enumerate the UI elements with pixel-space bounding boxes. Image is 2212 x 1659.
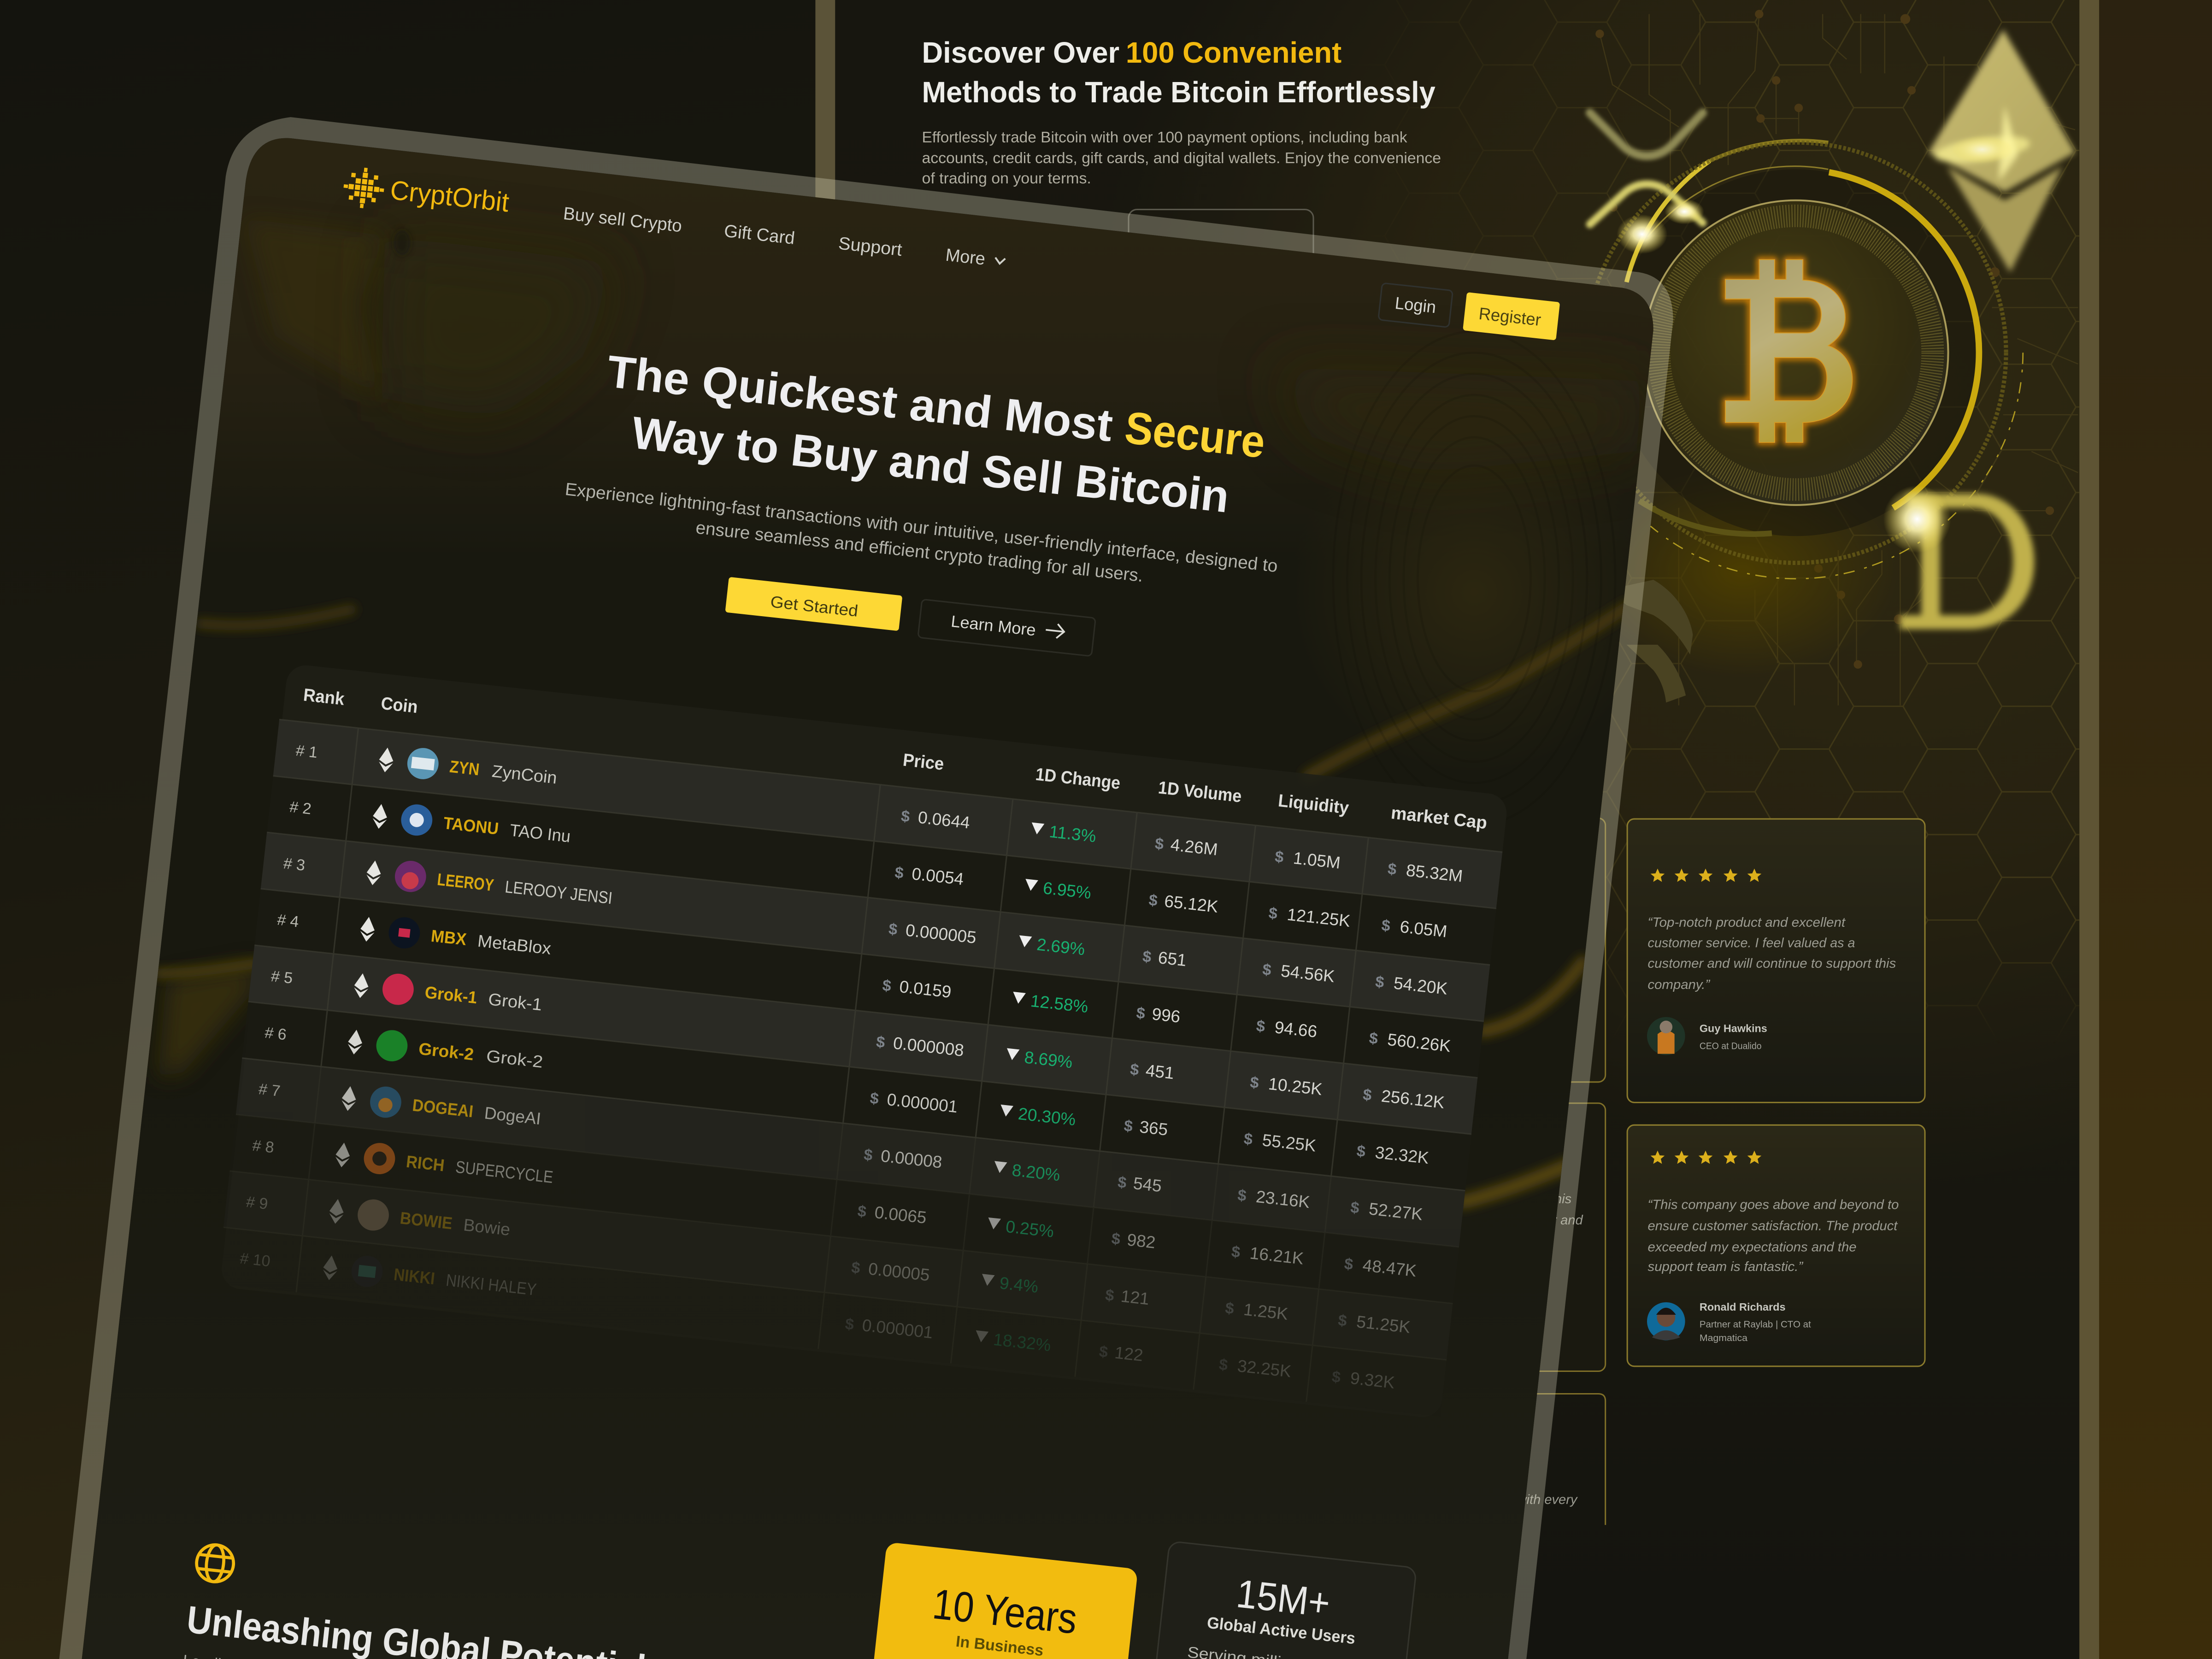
button: register [1463,292,1560,341]
table row 5 [248,945,1477,1134]
table row 2: 0.0054 [911,864,965,888]
table row 2: $ [1381,917,1391,935]
author: Guy Hawkins [1700,1022,1767,1034]
table row 8: 982 [1126,1230,1156,1252]
text block: discover description: of trading on your terms. [922,170,1091,187]
table row 9: # 9 [245,1193,269,1213]
table row 10: 32.25K [1236,1356,1292,1381]
table row 5: Grok-1 [424,983,478,1007]
table row 3 [261,832,1490,1021]
table row 7: # 7 [258,1080,281,1100]
table row 10 [217,1227,1447,1416]
table row 3: $ [888,920,898,939]
table row 9: 1.25K [1243,1300,1289,1324]
table row 5: 451 [1145,1061,1175,1082]
button: get started: Get Started [770,592,859,620]
table row 4: 0.0159 [899,977,952,1001]
button: register: Register [1478,304,1542,329]
table row 2: $ [1148,891,1159,910]
table row 6: $ [1243,1130,1253,1148]
table row 5: 8.69% [1024,1048,1073,1072]
table row 7: DOGEAI [412,1095,474,1121]
panel: partially hidden testimonial column [1411,818,1606,1525]
table row 3: $ [1262,961,1272,979]
quote text: ensure customer satisfaction. The product [1648,1218,1898,1233]
tablet bezel [59,117,1673,1659]
table row 8 [229,1114,1459,1304]
avatar [1647,1302,1685,1340]
table row 4: 94.66 [1274,1018,1318,1041]
table row 7: $ [1350,1199,1360,1217]
table row 3: $ [1141,948,1152,966]
table row 4: 560.26K [1387,1030,1452,1056]
table header: Coin [380,694,419,717]
icon: sparkles [1617,135,2013,553]
table row 5: $ [1249,1074,1260,1092]
icon: CryptOrbit mark [341,165,386,210]
table row 9: 9.4% [999,1273,1039,1296]
table row 10: $ [1331,1368,1341,1386]
button: learn more [918,599,1095,656]
table row 3: 651 [1157,948,1188,970]
table row 2: 6.95% [1042,878,1092,902]
table row 8: 48.47K [1362,1256,1418,1280]
table header: Rank [302,685,346,709]
avatar [1647,1017,1685,1055]
table row 2: # 2 [289,798,312,818]
quote text: “Top-notch product and excellent [1648,915,1846,930]
table row 7: DogeAI [483,1103,542,1128]
table row 6: $ [1123,1117,1134,1135]
table row 2: 6.05M [1399,917,1448,941]
author [1700,1301,1811,1343]
text block: discover heading: 100 Convenient [1126,36,1341,69]
tablet content, skewed plane [175,165,1564,1659]
mockup frame bars [815,0,2099,1659]
table row 1: 85.32M [1405,861,1464,886]
table row 1: $ [1387,860,1397,878]
table row 6: 20.30% [1017,1104,1077,1129]
author: Ronald Richards [1700,1301,1786,1313]
table row 5: $ [1129,1060,1140,1079]
icon: gold glow beneath coin [1587,465,1897,677]
table row 1: $ [900,807,911,826]
author: Partner at Raylab | CTO at [1700,1320,1811,1330]
table row 1: # 1 [295,742,318,761]
table row 1 [273,719,1502,908]
table row 1: ZYN [449,757,480,779]
table row 3: 54.20K [1393,974,1448,998]
table row 10: 122 [1114,1343,1144,1365]
table row 4 [254,889,1484,1078]
table row 6: # 6 [264,1024,288,1044]
table row 5: 256.12K [1380,1086,1446,1112]
table row 2: 121.25K [1286,905,1351,930]
table row 9: $ [1224,1299,1235,1318]
background waves [158,218,1658,1202]
table header [302,685,1488,833]
table row 3: # 3 [282,854,306,874]
table header: 1D Change [1035,765,1121,793]
table row 6: Grok-2 [418,1039,475,1064]
nav: links: Buy sell Crypto [562,204,683,236]
hexagon pattern [1464,0,2079,1006]
table row 8: 0.0065 [874,1203,928,1227]
quote text: customer and will continue to support this [1648,956,1896,971]
table row 5: $ [1362,1086,1373,1104]
table row 5: $ [875,1033,886,1051]
table row 9: Bowie [463,1215,511,1239]
table row 3: 0.000005 [905,921,977,947]
hero heading: Secure [1123,402,1268,467]
table row 8: # 8 [252,1137,275,1157]
hero description: Experience lightning-fast transactions with our intuitive, user-friendly interface, designed to [564,479,1279,576]
table row 6: 0.000001 [886,1090,959,1116]
table header: market Cap [1390,803,1488,833]
text block: discover heading: Methods to Trade Bitcoin Effortlessly [922,76,1435,109]
table row 9: $ [851,1259,861,1277]
table row 6: $ [1356,1142,1366,1160]
table row 10: 18.32% [992,1330,1052,1355]
stat card: 10 years [867,1542,1138,1659]
icon: leaf logo [1608,580,1693,702]
hero heading: Way to Buy and Sell Bitcoin [629,407,1232,522]
table row 10: NIKKI HALEY [445,1271,537,1299]
icon: XRP symbol [1590,113,1703,224]
nav: logo [341,165,511,224]
stat card: 15M+ [1147,1541,1417,1659]
table row 6 [242,1001,1471,1191]
table row 9 [224,1171,1453,1360]
circuit lines [1595,10,2078,706]
panel: testimonial Guy Hawkins [1627,819,1925,1102]
tablet screen [82,138,1658,1659]
table row 7: 8.20% [1011,1160,1061,1184]
quote text: support team is fantastic.” [1648,1259,1804,1274]
table row 4: $ [1255,1017,1266,1035]
author [1700,1022,1767,1051]
table row 4: 12.58% [1030,991,1089,1016]
table row 7: 0.00008 [880,1147,943,1172]
hero heading [598,346,1268,525]
table panel [217,663,1509,1419]
table row 1: $ [1274,848,1285,866]
icon: bitcoin coin with rings [1586,141,2023,579]
table row 10: NIKKI [393,1265,436,1288]
table row 3: 54.56K [1280,961,1336,986]
panel: partially hidden testimonial column: with every [1517,1492,1578,1507]
table row 10: 0.000001 [861,1316,934,1342]
table row 8: $ [1230,1243,1241,1261]
table row 4: MBX [430,926,468,949]
table row 2: TAO Inu [509,821,571,846]
text block: discover description [922,129,1441,187]
table row 8: RICH [405,1152,446,1175]
table row 9: BOWIE [399,1208,453,1233]
quote text: customer service. I feel valued as a [1648,936,1855,951]
nav: links [562,204,1006,271]
text block: discover heading [922,36,1435,109]
table row 1: 1.05M [1292,848,1341,872]
button: get started [725,577,902,631]
table row 10: 9.32K [1349,1369,1396,1392]
icon: globe [194,1543,235,1583]
table header: Price [902,750,945,774]
table row 8: $ [857,1202,867,1221]
table row 1: ZynCoin [491,762,558,788]
table row 2: 65.12K [1164,892,1219,916]
table row 9: 121 [1120,1287,1150,1308]
table row 2: $ [1268,904,1278,923]
table row 3: LEROOY JENSI [504,877,613,908]
table row 4: # 4 [276,911,300,931]
table row 4: MetaBlox [477,931,553,958]
table row 2 [267,776,1496,965]
button: login: Login [1394,294,1437,317]
table row 10: # 10 [239,1250,271,1270]
table row 6: $ [869,1089,880,1108]
stat card: 15M+: Global Active Users [1206,1613,1356,1647]
table row 1: 4.26M [1170,835,1219,859]
table row 5: 10.25K [1267,1074,1324,1099]
logo wordmark: CryptOrbit [389,175,511,218]
table row 4: $ [1135,1004,1146,1023]
table row 3: $ [1374,973,1385,991]
table row 10: $ [1098,1343,1109,1361]
stat card: 10 years: In Business [955,1633,1044,1659]
quote text: “This company goes above and beyond to [1648,1197,1899,1212]
hero description: ensure seamless and efficient crypto trading for all users. [695,518,1144,586]
table row 1: $ [1154,835,1165,853]
table row 8: $ [1343,1255,1354,1273]
table row 7: 23.16K [1255,1187,1311,1212]
button: learn more: Learn More [950,612,1037,640]
table row 4: $ [882,977,892,995]
table row 7: $ [863,1146,874,1164]
table row 8: SUPERCYCLE [455,1157,554,1187]
panel: testimonial Ronald Richards [1627,1125,1925,1366]
table row 2: TAONU [442,813,500,838]
button outline behind tablet [1129,210,1313,322]
table row 9: 0.00005 [867,1259,930,1285]
hero heading: The Quickest and Most [605,346,1115,451]
table header: Liquidity [1277,791,1350,818]
table row 10: $ [1218,1356,1229,1374]
table row 5: Grok-1 [488,989,543,1014]
table row 5: 0.000008 [892,1034,965,1060]
stars rating [1651,1151,1761,1164]
icon: ethereum diamond [1929,29,2075,272]
quote text: company.” [1648,977,1711,992]
stat card: 10 years: 10 Years [930,1580,1079,1643]
table row 9: 51.25K [1355,1312,1412,1337]
stat card: 15M+: 15M+ [1234,1571,1332,1626]
table row 8: 16.21K [1249,1243,1305,1268]
table row 6: Grok-2 [485,1047,544,1071]
table row 2: $ [894,864,905,882]
button: login [1378,283,1453,327]
stars rating [1651,869,1761,882]
table row 7: 52.27K [1368,1199,1424,1224]
table row 10: $ [844,1315,855,1334]
table row 4: 996 [1151,1005,1181,1026]
table row 6: 365 [1139,1118,1169,1139]
table row 8: 0.25% [1005,1217,1055,1241]
table row 4: $ [1368,1030,1379,1048]
table row 1: 0.0644 [917,808,971,832]
table row 3: LEEROY [436,870,495,895]
table row 7: $ [1117,1173,1128,1192]
panel: partially hidden testimonial column: r and [1552,1213,1583,1228]
table row 1: 11.3% [1048,822,1097,846]
table row 7: 545 [1132,1174,1163,1195]
table row 7 [236,1058,1465,1247]
table row 3: 2.69% [1036,935,1086,959]
text block: discover description: accounts, credit cards, gift cards, and digital wallets. Enjoy the convenience [922,150,1441,167]
panel: partially hidden testimonial column: his [1554,1192,1571,1206]
quote text: exceeded my expectations and the [1648,1240,1857,1254]
table row 9: $ [1105,1286,1115,1305]
quote text [1648,1197,1899,1274]
text block: discover description: Effortlessly trade Bitcoin with over 100 payment options, including bank [922,129,1407,146]
nav: links: Support [837,233,903,260]
table row 6: 32.32K [1374,1143,1430,1167]
author: Magmatica [1700,1333,1748,1343]
table row 9: $ [1337,1312,1348,1330]
table row 7: $ [1237,1187,1247,1205]
nav: links: Gift Card [723,221,796,248]
icon: DAI symbol [1900,494,2034,629]
text block: discover heading: Discover Over [922,36,1119,69]
author: CEO at Dualido [1700,1041,1762,1051]
table header: 1D Volume [1157,778,1243,806]
table row 6: 55.25K [1261,1130,1317,1155]
quote text [1648,915,1896,992]
nav: links: More [945,245,986,269]
table row 5: # 5 [270,967,294,987]
table row 8: $ [1111,1230,1121,1248]
